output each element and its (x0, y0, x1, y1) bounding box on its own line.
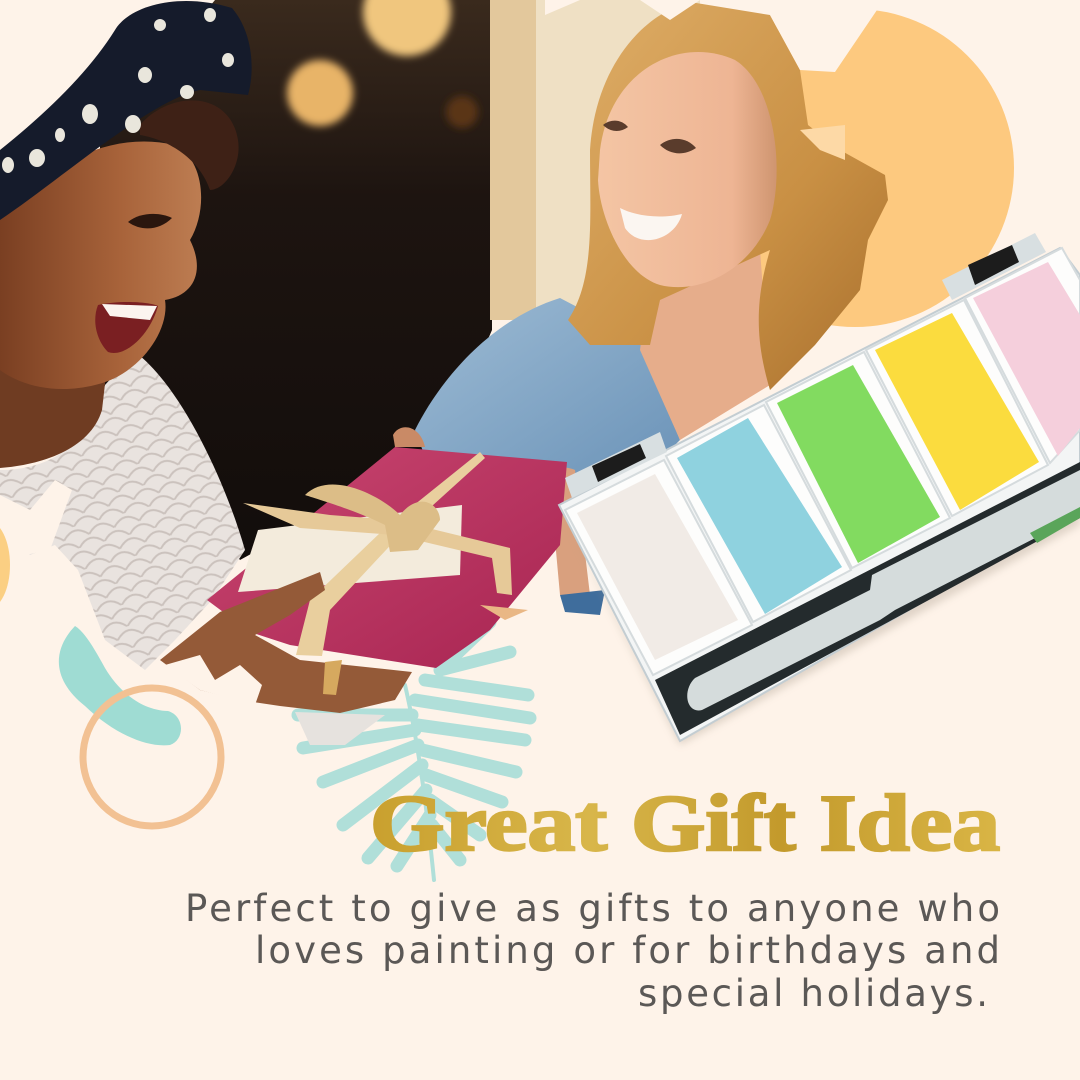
body text: Perfect to give as gifts to anyone who (185, 887, 1000, 930)
left clip (565, 432, 667, 498)
body text (185, 887, 1000, 1015)
left woman eye (128, 214, 172, 228)
torn paper flecks (0, 0, 880, 705)
left woman neck and chest (0, 340, 110, 468)
photo: two women exchanging a gift (0, 0, 888, 745)
left woman headscarf (0, 1, 252, 220)
pan: yellow (866, 300, 1048, 516)
right woman denim shirt (415, 298, 680, 480)
left woman body: white knit top (0, 352, 245, 670)
right woman face (598, 52, 777, 287)
palm leaf (298, 622, 530, 880)
gift box (207, 447, 567, 668)
heading: Great Gift Idea (370, 780, 1000, 868)
warm bokeh lights (363, 0, 451, 56)
decorative orange circle (696, 9, 1014, 327)
palette shadow (565, 505, 1080, 745)
pan: green (766, 352, 950, 568)
left woman open mouth (95, 302, 158, 353)
right woman smile (620, 208, 682, 240)
blue cuff under gift (560, 590, 605, 615)
body text: special holidays. (638, 972, 988, 1015)
pan: white (565, 460, 752, 675)
palette case (559, 248, 1080, 741)
right woman neck (640, 250, 770, 440)
right clip (942, 233, 1046, 300)
right hand behind gift (393, 427, 425, 447)
pan: pink (965, 248, 1080, 463)
left woman short hair (140, 100, 239, 190)
body text: loves painting or for birthdays and (255, 929, 1000, 972)
palette product: watercolor case (559, 233, 1080, 745)
pan: blue (666, 405, 851, 622)
water brush pen (687, 470, 1080, 710)
gift bow (305, 485, 440, 552)
right woman eyes (603, 121, 628, 131)
gift ribbon (296, 452, 485, 656)
left woman face (0, 141, 201, 389)
gift card (238, 505, 462, 592)
brush tray (655, 462, 1080, 735)
dark restaurant background (100, 0, 492, 560)
left woman hand and ring (160, 572, 412, 713)
decorative orange half circle at left edge (0, 521, 10, 609)
decorative teal arc (59, 626, 181, 745)
right woman hair (568, 2, 888, 390)
decorative peach ring (83, 688, 221, 826)
bright window (490, 0, 700, 320)
